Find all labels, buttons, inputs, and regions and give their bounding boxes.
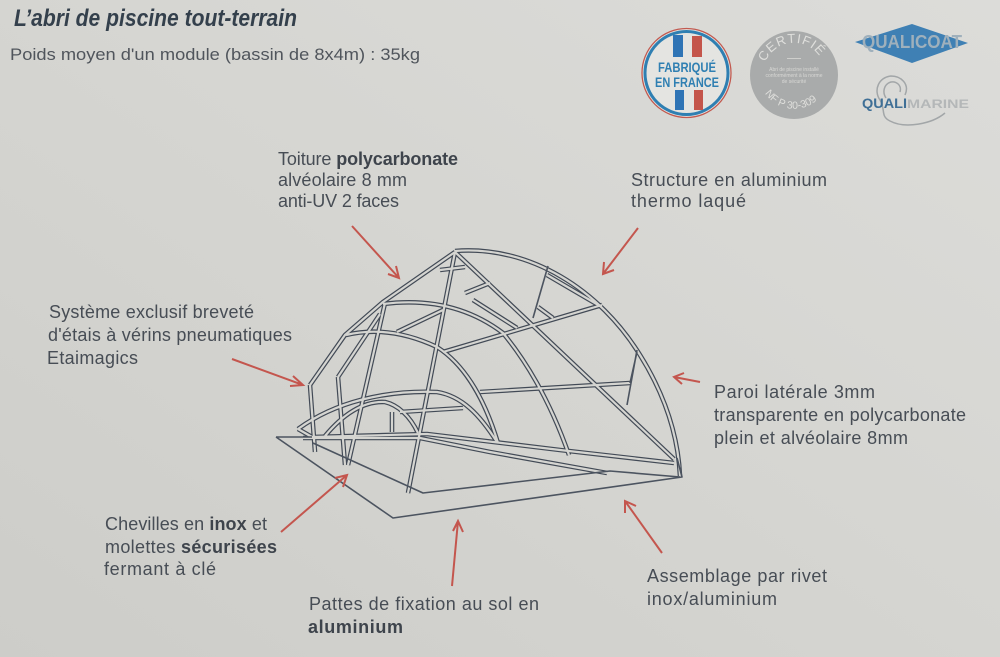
label: pattes: aluminium [308,617,403,637]
label: étais: Système exclusif breveté [49,302,254,322]
subtitle: Poids moyen d'un module (bassin de 8x4m) : 35kg [10,45,420,64]
label: paroi: Paroi latérale 3mm [714,382,875,402]
arrow: pattes [452,521,463,586]
label: structure: Structure en aluminium [631,170,827,190]
label: toiture: Toiture polycarbonate [278,149,458,169]
arrow: paroi [674,373,700,384]
logo: Certifié NF P 30-309: NF P 30-309 [766,90,816,109]
logo: Qualimarine [862,76,969,125]
logo: Certifié NF P 30-309: de sécurité [782,79,806,85]
title: L’abri de piscine tout-terrain [14,5,297,32]
logo: Fabriqué en France: FABRIQUÉ [658,59,716,75]
arrow: toiture [352,226,399,278]
logo: Fabriqué en France [642,28,731,118]
arrow: assemblage [625,501,662,553]
label: pattes: Pattes de fixation au sol en [309,594,539,614]
label: étais: Etaimagics [47,348,138,368]
arrow: structure [603,228,638,274]
label: toiture: anti-UV 2 faces [278,191,399,211]
logo: Qualicoat: QUALICOAT [862,32,962,52]
label: assemblage: inox/aluminium [647,589,777,609]
logo: Qualimarine: QUALI [862,95,907,111]
label: chevilles: Chevilles en inox et [105,514,267,534]
logo: Qualicoat [855,24,968,63]
label: paroi: plein et alvéolaire 8mm [714,428,908,448]
label: toiture: alvéolaire 8 mm [278,170,407,190]
label: assemblage: Assemblage par rivet [647,566,827,586]
label: paroi: transparente en polycarbonate [714,405,966,425]
label: étais: d'étais à vérins pneumatiques [48,325,292,345]
logo: Certifié NF P 30-309: CERTIFIÉ [759,34,826,60]
logo: Qualimarine: MARINE [907,97,969,111]
arrow: chevilles [281,475,347,532]
label: chevilles: molettes sécurisées [105,537,277,557]
pool enclosure technical drawing [276,250,682,518]
logo: Certifié NF P 30-309: conformément à la norme [766,73,823,79]
logo: Certifié NF P 30-309: Abri de piscine installé [769,67,819,73]
label: chevilles: fermant à clé [104,559,216,579]
logo: Certifié NF P 30-309 [750,31,838,119]
logo: Fabriqué en France: EN FRANCE [655,74,719,90]
arrow: étais [232,359,303,386]
label: structure: thermo laqué [631,191,746,211]
